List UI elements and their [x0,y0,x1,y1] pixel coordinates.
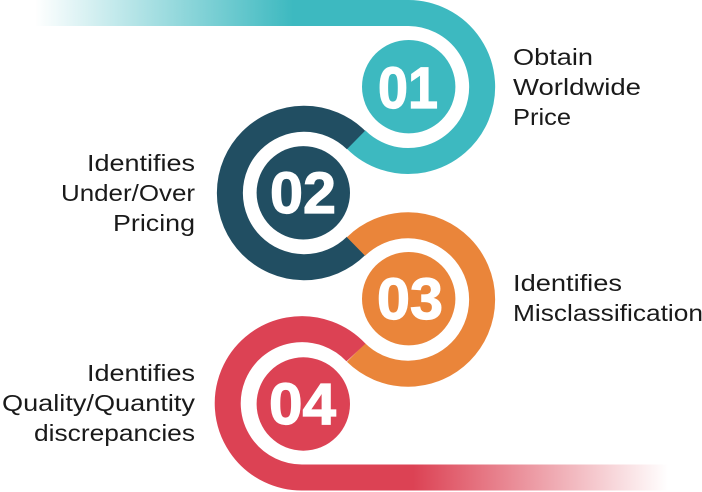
label: Identifies Quality/Quantity discrepancies [2,360,196,446]
label: Obtain Worldwide Price: Obtain [513,44,593,70]
step 02: navy ribbon, badge and label [61,119,356,267]
ribbon: navy arc [230,119,356,267]
step 04: red ribbon, badge and label [2,329,668,490]
ribbon: orange arc [356,225,482,374]
label: Identifies Misclassification: Misclassification [513,300,702,326]
badge: 04: 04 [269,372,336,437]
ribbon: teal arc [292,13,482,161]
label: Obtain Worldwide Price [513,44,641,130]
label: Identifies Misclassification [513,270,702,326]
badge: 03 [362,252,455,345]
label: Identifies Misclassification: Identifies [513,270,622,296]
label: Identifies Quality/Quantity discrepancies: Quality/Quantity [2,390,196,416]
ribbon: red fading tail [413,464,668,490]
label: Identifies Quality/Quantity discrepancies: Identifies [87,360,195,386]
label: Identifies Under/Over Pricing: Identifies [87,150,195,176]
badge: 02 [257,146,350,240]
label: Identifies Under/Over Pricing [61,150,195,236]
label: Identifies Under/Over Pricing: Under/Over [61,180,195,206]
label: Obtain Worldwide Price: Price [513,104,571,130]
step 01: teal ribbon, badge and label [35,0,641,161]
badge: 02: 02 [270,161,336,226]
ribbon: teal fading lead-in [35,0,293,26]
badge: 03: 03 [377,267,443,332]
label: Identifies Quality/Quantity discrepancies: discrepancies [34,420,195,446]
badge: 01: 01 [378,56,438,121]
label: Identifies Under/Over Pricing: Pricing [113,210,195,236]
step 03: orange ribbon, badge and label [356,225,702,374]
badge: 04 [257,357,350,451]
ribbon: red arc [228,329,414,478]
badge: 01 [362,40,455,133]
label: Obtain Worldwide Price: Worldwide [513,74,641,100]
